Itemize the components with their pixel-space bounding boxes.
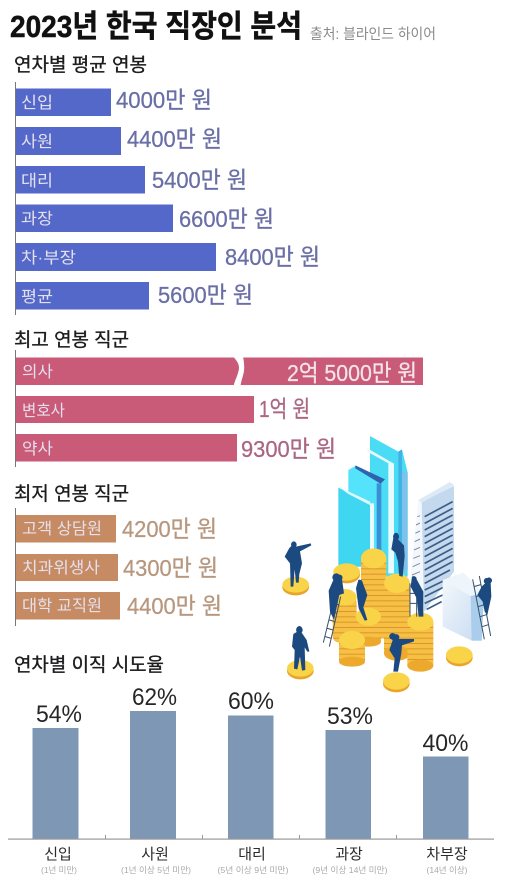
bar: manager: 과장 <box>21 210 53 228</box>
bar: assistant manager: 5400만 원 <box>152 167 247 193</box>
panel: highest paid jobs <box>14 329 423 467</box>
bar chart <box>8 711 494 840</box>
bar: university staff <box>16 592 222 620</box>
bar: lawyer: 변호사 <box>22 402 65 420</box>
bar: dental hygienist: 치과위생사 <box>22 559 100 577</box>
icon: business people <box>285 533 492 672</box>
tenure labels: (5년 이상 9년 미만) <box>218 865 289 875</box>
icon: ladders <box>323 576 491 647</box>
bar: new hire: 4000만 원 <box>116 87 212 113</box>
bar: average: 평균 <box>21 288 53 306</box>
value labels <box>36 684 468 757</box>
heading: highest paid: 최고 연봉 직군 <box>14 329 129 351</box>
heading: lowest paid: 최저 연봉 직군 <box>14 483 129 505</box>
bar: pharmacist: 9300만 원 <box>241 436 336 462</box>
bar: customer service agent <box>16 515 217 542</box>
category labels <box>44 846 468 863</box>
category labels: 사원 <box>141 846 169 863</box>
category labels: 대리 <box>238 846 266 863</box>
bar: dental hygienist: 4300만 원 <box>123 555 218 581</box>
bar: doctor with axis break: 2억 5000만 원 <box>287 360 417 386</box>
bar: average: 5600만 원 <box>158 282 253 308</box>
bar: university staff: 4400만 원 <box>127 593 222 619</box>
bar: average <box>16 282 253 310</box>
title: 2023년 한국 직장인 분석 <box>10 9 302 44</box>
value labels: 62% <box>132 684 177 711</box>
bar: deputy and general manager: 8400만 원 <box>225 244 320 270</box>
bar: staff: 4400만 원 <box>127 126 222 152</box>
bar: new hire: 신입 <box>21 94 53 112</box>
category labels: 신입 <box>44 846 72 863</box>
icon: low white building <box>443 573 484 641</box>
bar: lawyer: 1억 원 <box>259 396 310 422</box>
category labels: 과장 <box>335 846 363 863</box>
panel: average salary by years <box>14 54 320 315</box>
bar: staff <box>16 126 222 155</box>
bar: university staff: 대학 교직원 <box>22 597 102 615</box>
bar: pharmacist: 약사 <box>22 440 53 458</box>
bar: pharmacist <box>16 434 336 462</box>
heading: average salary: 연차별 평균 연봉 <box>14 54 147 76</box>
panel: lowest paid jobs <box>14 483 222 626</box>
icon: cyan towers <box>338 436 408 577</box>
panel: turnover attempt rate by years <box>8 654 494 875</box>
heading: turnover attempt rate: 연차별 이직 시도율 <box>14 654 164 676</box>
tenure labels: (1년 미만) <box>41 865 77 875</box>
bar: deputy and general manager: 차·부장 <box>21 249 76 267</box>
bar: manager: 6600만 원 <box>179 206 274 232</box>
tenure labels: (9년 이상 14년 미만) <box>312 865 388 875</box>
value labels: 53% <box>327 703 373 730</box>
bar: new hire <box>16 87 212 116</box>
bar: lawyer <box>16 396 310 423</box>
icon: coin stacks <box>333 548 433 672</box>
tenure labels: (14년 이상) <box>426 865 468 875</box>
tenure labels <box>41 865 468 875</box>
bar: deputy and general manager <box>16 243 320 271</box>
bar: customer service agent: 고객 상담원 <box>22 520 102 538</box>
icon: flat coins <box>282 563 473 692</box>
bar: doctor with axis break: 의사 <box>22 363 53 381</box>
bar: dental hygienist <box>16 554 218 581</box>
bar: doctor with axis break <box>16 357 423 386</box>
bar: assistant manager <box>16 166 247 194</box>
bar: customer service agent: 4200만 원 <box>122 516 217 542</box>
category labels: 차부장 <box>426 846 468 863</box>
value labels: 60% <box>228 688 274 715</box>
source note: 출처: 블라인드 하이어 <box>310 26 436 43</box>
bar: staff: 사원 <box>21 133 53 151</box>
bar: manager <box>16 204 274 232</box>
bar: assistant manager: 대리 <box>21 172 53 190</box>
illustration: city towers, coin stacks and business people <box>282 436 492 692</box>
value labels: 40% <box>422 730 468 757</box>
value labels: 54% <box>36 701 82 728</box>
tenure labels: (1년 이상 5년 미만) <box>121 865 191 875</box>
icon: striped office tower <box>410 482 454 613</box>
